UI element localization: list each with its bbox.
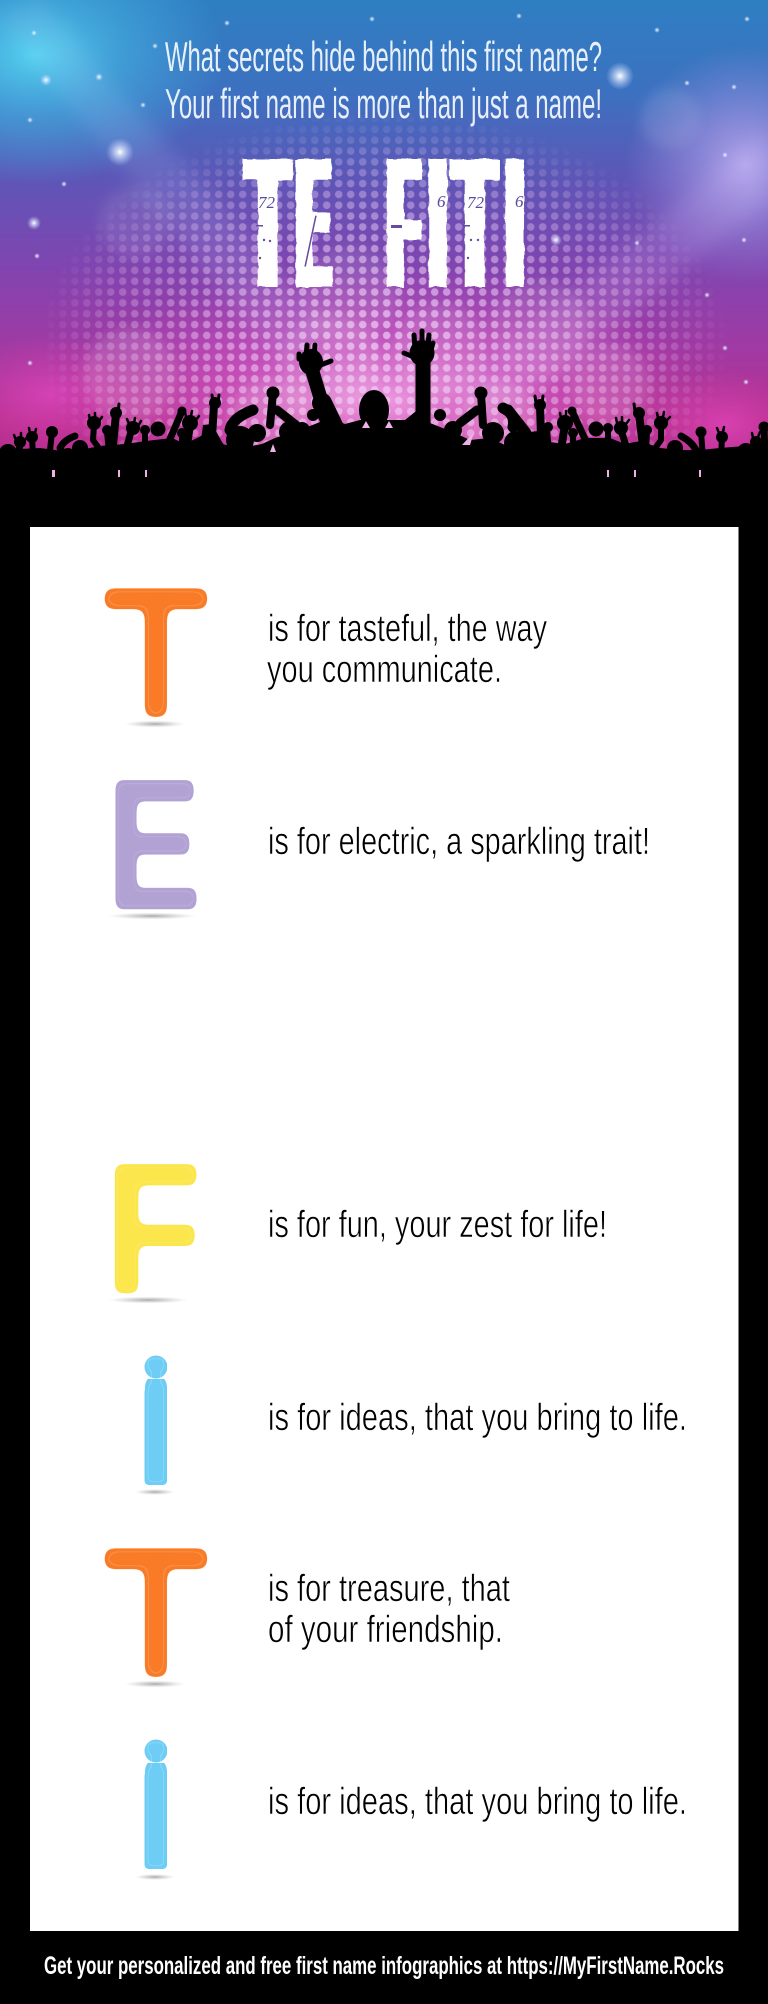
row: i ideas again — [138, 1740, 684, 1880]
crowd silhouette — [0, 331, 768, 530]
row: i ideas: i — [131, 1323, 181, 1523]
title: name — [247, 120, 524, 327]
title: name: F — [388, 120, 419, 327]
row: T tasteful: is for tasteful, the way — [268, 608, 547, 650]
row: E electric: is for electric, a sparkling trait! — [268, 821, 650, 863]
title: name: I — [430, 120, 446, 327]
title: name: 6 — [515, 192, 524, 211]
infographic canvas: I — [507, 120, 523, 327]
row: F fun — [104, 1123, 607, 1333]
title: name: T — [454, 120, 496, 327]
row: E electric: E — [106, 741, 202, 949]
row: T tasteful: T — [100, 548, 211, 758]
row: i ideas again: i — [131, 1707, 181, 1907]
heading: tagline — [165, 33, 602, 127]
row: T treasure: T — [100, 1508, 211, 1718]
row: T tasteful — [100, 548, 547, 758]
row: F fun: F — [104, 1123, 202, 1333]
row: F fun: is for fun, your zest for life! — [268, 1204, 607, 1246]
title: name: 72 — [258, 193, 276, 212]
row: i ideas — [138, 1356, 684, 1494]
row: T tasteful: you communicate. — [267, 649, 502, 691]
title: name: E — [298, 120, 330, 327]
row: T treasure: of your friendship. — [268, 1609, 503, 1651]
row: T treasure: is for treasure, that — [268, 1568, 510, 1610]
row: E electric — [106, 741, 650, 949]
panel: white letter list — [30, 527, 738, 1931]
row: T treasure — [100, 1508, 510, 1718]
panel: concert stage header background — [0, 0, 768, 450]
title: name: T — [247, 120, 289, 327]
title: name: 6 — [437, 192, 446, 211]
title: name: 72 — [467, 193, 484, 212]
